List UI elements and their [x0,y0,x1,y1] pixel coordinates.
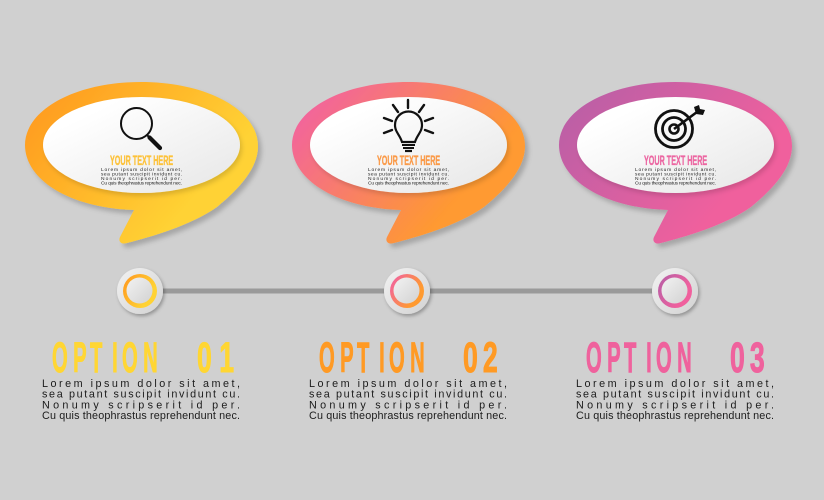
icon: light bulb [384,100,433,151]
icon: magnifying glass [121,108,160,148]
small text block: Nonumy scripserit id per. [635,176,716,182]
heading: option 01: 01 [197,334,234,382]
small text block: Lorem ipsum dolor sit amet, [368,167,449,173]
text block: option 01 [42,378,240,422]
icon: target with arrow [656,105,705,148]
timeline node 1 [117,268,163,314]
text block: option 02: Lorem ipsum dolor sit amet, [309,378,507,390]
small text block: Cu quis theophrastus reprehendunt nec. [635,180,716,186]
small heading: YOUR TEXT HERE [644,154,708,169]
text block: option 03: sea putant suscipit invidunt cu. [576,388,774,400]
heading: option 02: OPTION [319,335,425,382]
small text block: Nonumy scripserit id per. [368,176,449,182]
timeline connector line [155,288,665,294]
small text block: Cu quis theophrastus reprehendunt nec. [101,180,182,186]
heading: option 02 [319,334,498,382]
small text block: sea putant suscipit invidunt cu. [101,172,182,178]
heading: option 01: OPTION [52,335,158,382]
text block: option 02: Nonumy scripserit id per. [309,400,507,412]
heading: option 03 [586,334,765,382]
heading: option 02: 02 [463,334,498,382]
small text block [635,167,716,186]
small heading: YOUR TEXT HERE [377,154,441,169]
panel: speech bubble 1 [25,82,258,244]
small text block: Lorem ipsum dolor sit amet, [635,167,716,173]
small heading: YOUR TEXT HERE [110,154,174,169]
heading: option 03: OPTION [586,335,692,382]
small text block [101,167,182,186]
small text block: Cu quis theophrastus reprehendunt nec. [368,180,449,186]
heading: option 03: 03 [730,334,765,382]
text block: option 03 [576,378,774,422]
text block: option 02: Cu quis theophrastus reprehendunt nec. [309,410,507,422]
timeline node 2 [384,268,430,314]
text block: option 02: sea putant suscipit invidunt cu. [309,388,507,400]
heading: option 01 [52,334,234,382]
text block: option 03: Lorem ipsum dolor sit amet, [576,378,774,390]
small text block: sea putant suscipit invidunt cu. [368,172,449,178]
small text block: Lorem ipsum dolor sit amet, [101,167,182,173]
small text block: sea putant suscipit invidunt cu. [635,172,716,178]
panel: speech bubble 3 [559,82,792,244]
text block: option 01: Cu quis theophrastus reprehendunt nec. [42,410,240,422]
text block: option 01: Lorem ipsum dolor sit amet, [42,378,240,390]
text block: option 03: Nonumy scripserit id per. [576,400,774,412]
small text block: Nonumy scripserit id per. [101,176,182,182]
panel: speech bubble 2 [292,82,525,244]
timeline node 3 [652,268,698,314]
text block: option 01: sea putant suscipit invidunt cu. [42,388,240,400]
small text block [368,167,449,186]
text block: option 03: Cu quis theophrastus reprehendunt nec. [576,410,774,422]
text block: option 02 [309,378,507,422]
text block: option 01: Nonumy scripserit id per. [42,400,240,412]
